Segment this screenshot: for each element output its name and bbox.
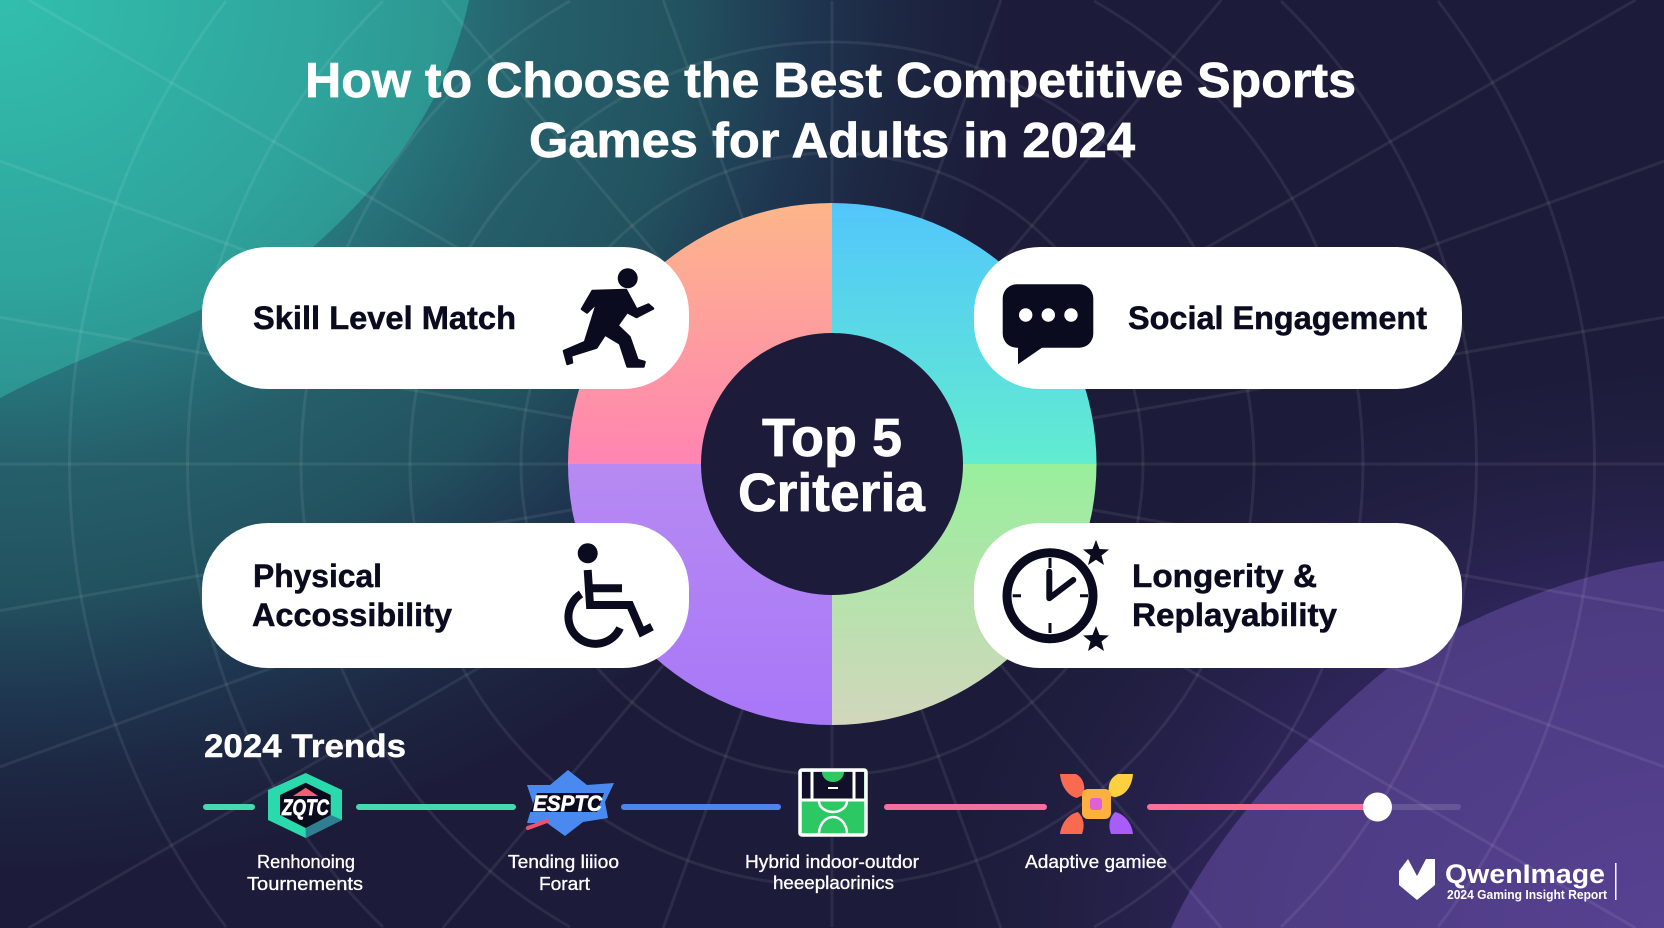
card: longevity and replayability	[974, 523, 1462, 668]
label: hybrid indoor-outdoor	[745, 852, 919, 893]
title: How to Choose the Best Competitive Sports	[305, 54, 1356, 108]
label: tending format: Tending liiioo	[508, 852, 619, 872]
label: adaptive games: Adaptive gamiee	[1025, 852, 1167, 872]
icon: wheelchair	[568, 543, 652, 644]
icon: shield check	[1399, 859, 1435, 900]
icon: runner	[564, 268, 653, 366]
donut wheel: top 5 criteria: Criteria	[738, 463, 926, 523]
slider knob	[1363, 792, 1392, 822]
title	[305, 54, 1356, 168]
trends timeline track	[206, 792, 1458, 822]
label: tending format: Forart	[539, 874, 590, 894]
icon: star esports badge: ESPTC	[533, 791, 603, 816]
card: physical accessibility	[202, 523, 689, 668]
icon: hexagon tournament badge	[268, 773, 342, 838]
card: skill level match	[202, 247, 689, 389]
card: longevity and replayability: Replayability	[1132, 597, 1337, 633]
donut wheel: top 5 criteria	[568, 203, 1096, 725]
label: tournaments: Renhonoing	[257, 852, 355, 872]
icon: sports field	[800, 770, 866, 835]
card: longevity and replayability: Longerity &	[1132, 558, 1317, 594]
label: tournaments: Tournements	[247, 874, 363, 894]
label: hybrid indoor-outdoor: Hybrid indoor-outdor	[745, 852, 919, 872]
icon: speech bubble	[1003, 284, 1093, 364]
brand logo	[1399, 859, 1616, 902]
brand logo: QwenImage	[1445, 859, 1605, 889]
icon: clock with stars	[1007, 540, 1109, 651]
icon: hexagon tournament badge: ZQTC	[281, 795, 330, 820]
icon: adaptive games flower	[1060, 774, 1133, 834]
label: tournaments	[247, 852, 363, 894]
heading: 2024 trends: 2024 Trends	[204, 728, 406, 764]
card: social engagement: Social Engagement	[1128, 300, 1427, 336]
icon: star esports badge	[527, 770, 614, 836]
title: Games for Adults in 2024	[529, 114, 1135, 168]
card: physical accessibility: Physical	[253, 558, 382, 594]
card: skill level match: Skill Level Match	[253, 300, 516, 336]
card: social engagement	[974, 247, 1462, 389]
brand logo: 2024 Gaming Insight Report	[1447, 887, 1608, 902]
purple corner blob	[1171, 561, 1664, 928]
label: hybrid indoor-outdoor: heeeplaorinics	[773, 873, 894, 893]
donut wheel: top 5 criteria: Top 5	[762, 408, 902, 468]
label: tending format	[508, 852, 619, 894]
teal corner blob	[0, 0, 469, 398]
card: physical accessibility: Accossibility	[252, 597, 452, 633]
